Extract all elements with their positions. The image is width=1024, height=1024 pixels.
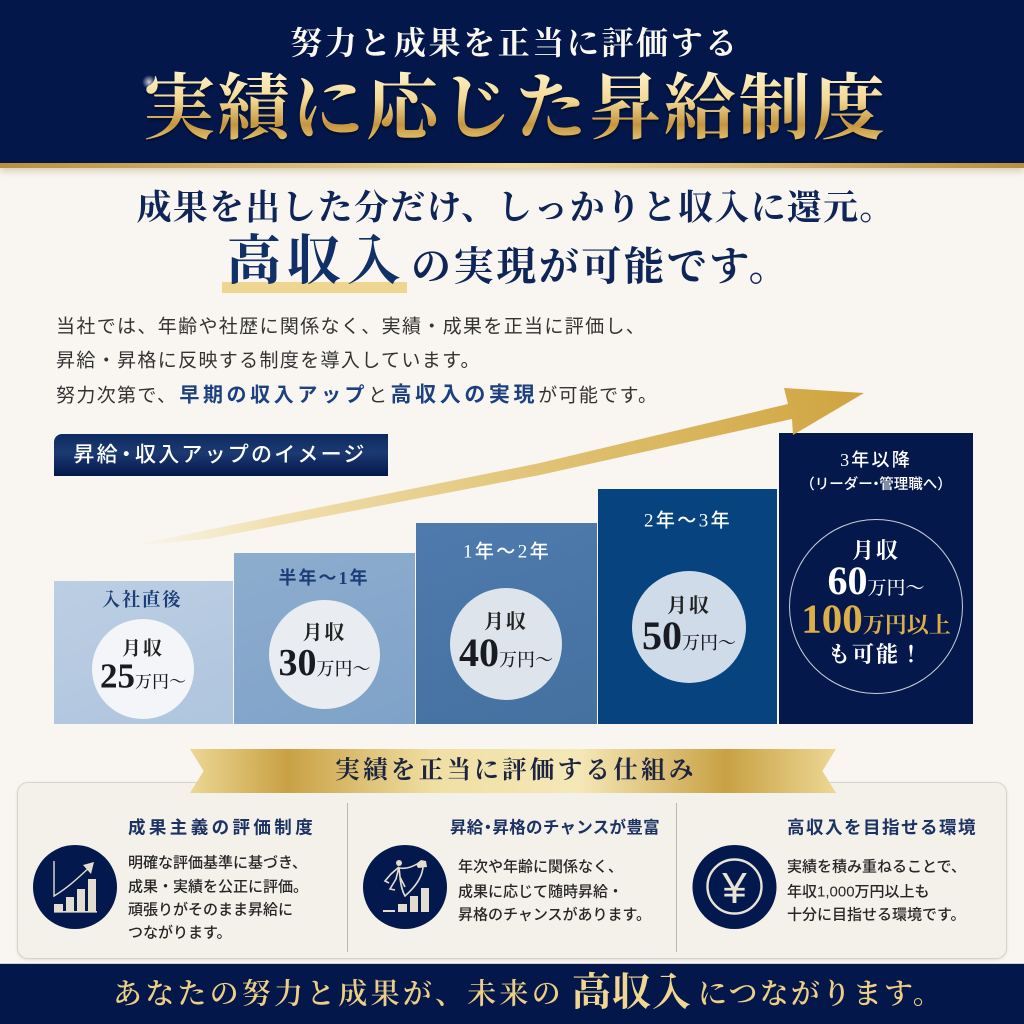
period label: 1年〜2年 [463, 542, 551, 562]
salary circle: 月収 [122, 638, 164, 660]
heading: 成果主義の評価制度 [128, 817, 316, 837]
description: 年次や年齢に関係なく、 [458, 858, 623, 876]
salary circle: 30万円〜 [278, 642, 370, 684]
icon: climbing figures [363, 845, 447, 929]
salary circle: 50万円〜 [642, 613, 736, 658]
bar: joining [54, 581, 233, 724]
role label: （リーダー・管理職へ） [800, 477, 952, 493]
heading: 高収入を目指せる環境 [787, 817, 977, 837]
salary circle [92, 619, 194, 719]
description: 明確な評価基準に基づき、 [128, 854, 307, 872]
description: 十分に目指せる環境です。 [787, 906, 966, 924]
column dividers [347, 803, 348, 952]
title sparkle [142, 75, 156, 89]
column 3: high income environment [692, 817, 977, 929]
mechanism panel [17, 782, 1007, 959]
description: つながります。 [128, 924, 232, 942]
footer emphasis: 高収入 [572, 972, 692, 1014]
salary circle: 25万円〜 [100, 656, 186, 696]
footer band [0, 963, 1024, 1024]
lead line: 成果を出した分だけ、しっかりと収入に還元。 [137, 188, 895, 228]
gold ribbon heading [190, 749, 836, 793]
headline remainder: の実現が可能です。 [411, 244, 791, 289]
salary circle: 40万円〜 [459, 630, 553, 675]
icon: growth chart [33, 845, 117, 929]
description: 実績を積み重ねることで、 [787, 858, 966, 876]
headline emphasis: 高収入 [227, 231, 407, 291]
description: 成果・実績を公正に評価。 [128, 878, 308, 896]
intro text [56, 316, 658, 406]
intro text: 努力次第で、早期の収入アップと高収入の実現が可能です。 [56, 384, 658, 406]
headline: high income [222, 231, 791, 293]
description [787, 858, 966, 924]
period label: 入社直後 [102, 591, 182, 611]
bar: half year [234, 553, 415, 724]
growth arrow [149, 388, 864, 544]
bar: year 3+ [779, 433, 973, 724]
salary circle: 月収 [484, 611, 528, 633]
salary circle: 月収 [667, 595, 711, 617]
salary circle [450, 588, 562, 700]
salary circle: 月収 [302, 622, 346, 644]
header gold rule [0, 163, 1024, 168]
description: 昇格のチャンスがあります。 [458, 906, 651, 924]
description: 頑張りがそのまま昇給に [128, 902, 293, 918]
description [458, 858, 651, 924]
amount from 60: 60万円〜 [827, 558, 925, 603]
column 2: raise chances [363, 818, 660, 929]
icon: yen coin [692, 845, 776, 929]
main title: 実績に応じた昇給制度 [143, 69, 887, 149]
bar: year 2-3 [598, 489, 777, 724]
description: 年収1,000万円以上も [787, 884, 930, 900]
section label: 昇給・収入アップのイメージ [73, 444, 367, 466]
salary circle [269, 600, 380, 709]
salary circle [632, 571, 746, 683]
column 1: merit evaluation [33, 817, 316, 942]
description: 成果に応じて随時昇給・ [458, 884, 623, 900]
intro text: 当社では、年齢や社歴に関係なく、実績・成果を正当に評価し、 [56, 316, 646, 338]
possible note: も可能！ [828, 642, 924, 667]
section label [54, 434, 388, 476]
period label: 2年〜3年 [644, 510, 732, 532]
header subtitle: 努力と成果を正当に評価する [290, 25, 740, 61]
footer message: あなたの努力と成果が、未来の [113, 978, 564, 1010]
heading: 昇給・昇格のチャンスが豊富 [450, 819, 660, 837]
description [128, 854, 308, 942]
bar: year 1-2 [416, 523, 597, 724]
amount 100 plus: 100万円以上 [801, 596, 951, 642]
ribbon text: 実績を正当に評価する仕組み [335, 757, 697, 784]
intro text: 昇給・昇格に反映する制度を導入しています。 [56, 350, 481, 372]
monthly label: 月収 [852, 538, 900, 563]
header band [0, 0, 1024, 168]
period label: 3年以降 [840, 450, 912, 470]
period label: 半年〜1年 [278, 568, 370, 588]
gold underline [222, 282, 407, 293]
salary ring [789, 519, 963, 694]
icon: yen coin: ¥ [721, 864, 747, 913]
footer ending: につながります。 [698, 978, 944, 1010]
